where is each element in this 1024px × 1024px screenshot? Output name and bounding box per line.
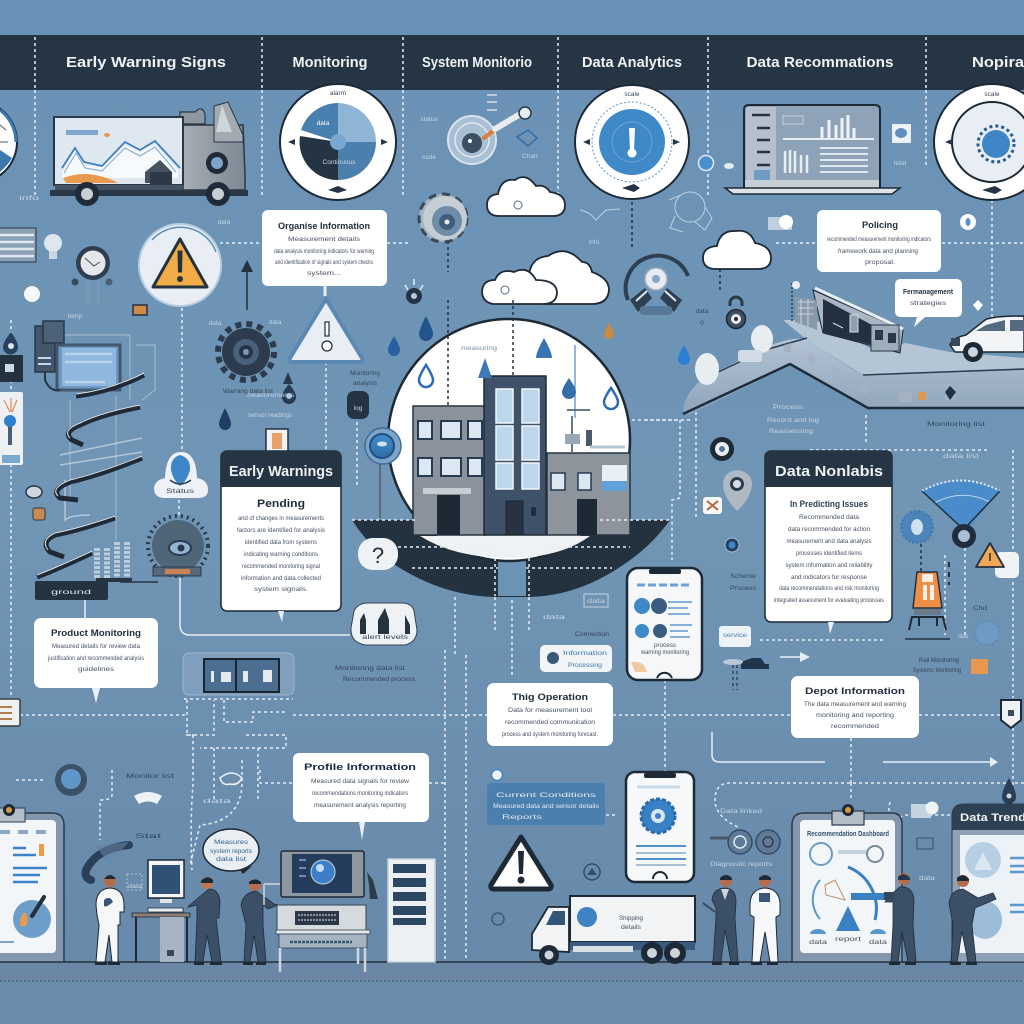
icon: clipped left gauge circle [0, 101, 17, 183]
icon: sensor gear on base [120, 516, 208, 612]
icon: bottom-left small glyphs: data [203, 798, 232, 805]
icon: orange tower [905, 572, 950, 639]
heading: data analytics: Data Analytics [582, 54, 682, 71]
chart: monitoring pie dial: data [317, 120, 330, 127]
scene: floor [0, 962, 1024, 1024]
icon: phone with dashboard: warning monitoring [640, 649, 689, 656]
icon: water drops group [3, 316, 1016, 804]
callout: policy: recommended measurement monitoring indicators [827, 236, 932, 243]
connector lines over the central illustration [352, 300, 680, 596]
icon: delivery truck: Shipping [619, 915, 643, 922]
text: labels under road [767, 404, 985, 460]
panel: data trends [952, 804, 1024, 962]
icon: small white tags: 0 [700, 320, 704, 327]
icon: dark tag: log [354, 405, 363, 412]
icon: system monitor swirl with brush: Chart [522, 153, 538, 160]
icon: speech bubble: Measures [214, 839, 249, 846]
text: small label cluster: measurements [246, 392, 295, 399]
callout: small blue status [540, 645, 612, 672]
text: labels under road: Process [773, 404, 804, 411]
callout: small blue status: Processing [568, 662, 602, 669]
panel text lines: system signals. [254, 586, 308, 593]
icon: small shield glyphs [492, 864, 600, 925]
text: small label pair [335, 594, 609, 683]
icon: side tags near data panel [911, 802, 938, 882]
icon: cap over first worker: data [128, 883, 142, 890]
callout: diagnostic information: data analysis monitoring indicators for warning [274, 248, 374, 255]
worker: presenter at data panel [949, 875, 996, 965]
worker: white coat right [750, 875, 780, 965]
callout: small framework [895, 279, 983, 327]
icon: left orange tag [0, 699, 20, 726]
icon: laptop dashboard [725, 105, 900, 194]
callout: policy: proposal. [865, 259, 895, 266]
icon: cloud right [703, 231, 771, 269]
drops inside circle [419, 365, 433, 387]
icon: phone with gear [626, 772, 694, 882]
panel text lines: processes identified items [796, 550, 863, 557]
callout: diagnostic information: Measurement details [288, 236, 361, 243]
callout: blue data note: Measured data and sensor details [493, 803, 600, 810]
icon: bottom-left small glyphs: Stat [135, 833, 161, 840]
panel: right clipboard: Recommendation Dashboard [807, 831, 889, 838]
icon: system monitor swirl with brush [420, 95, 538, 164]
road with station and car [683, 281, 1024, 415]
car [950, 316, 1024, 352]
icon: twin gauges with caption [710, 808, 780, 868]
icon: speech bubble [203, 829, 259, 874]
icon: pale blue gear [973, 605, 999, 645]
icon: cloud small [487, 177, 565, 216]
text: small label cluster: data [209, 320, 222, 327]
panel heading: Data Nonlabis [775, 463, 883, 480]
icon: orange tag [266, 429, 288, 453]
icon: network sketch [580, 192, 712, 232]
panel text lines: integrated assessment for evaluating processes [774, 597, 885, 604]
icon: wifi signal fan [922, 480, 1000, 638]
panel text lines [237, 515, 326, 593]
icon: small white tags [589, 214, 976, 327]
icon: padlock [726, 297, 746, 328]
right building [547, 453, 630, 535]
callout: profit monitoring: measurement analysis reporting [314, 802, 406, 809]
callout: depot information: The data measurement and warning [804, 701, 906, 708]
icon: double cloud [482, 251, 609, 304]
panel text lines: measurement and data analysis [786, 538, 872, 545]
panel heading: Early Warnings [229, 463, 333, 480]
icon: sparkline bubble: alert levels [362, 634, 409, 641]
icon: steering dial [626, 256, 688, 315]
panel text lines: and of changes in measurements [238, 515, 325, 522]
text: small label cluster: data [269, 319, 282, 326]
panel: right clipboard: report [835, 936, 861, 943]
icon: system monitor swirl with brush: code [422, 154, 436, 161]
text: labels beside orange tag: Systems Monitoring [913, 667, 961, 674]
icon: shield badge [1001, 700, 1021, 728]
panel text lines: identified data from systems [245, 539, 318, 546]
text: small label pair: Monitoring data list [335, 665, 405, 672]
icon: light bulb [44, 234, 62, 259]
icon: mini van and tag: service [723, 632, 747, 639]
callout: depot information [791, 676, 919, 738]
callout: trip operation: process and system monitoring forecast. [502, 731, 598, 738]
worker: operator at desk [188, 877, 222, 965]
callout: product monitoring: guidelines [78, 666, 115, 673]
panel subtitle: Pending [257, 498, 305, 510]
text: labels under road: Monitoring list [927, 421, 985, 428]
icon: left status tags [0, 355, 23, 465]
icon: sensor ring and location pin: Scheme [730, 573, 756, 580]
dark base platform [352, 520, 670, 597]
icon: pale warning triangle [290, 299, 362, 362]
icon: small white tags: data [696, 308, 709, 315]
panel text lines: information and data collected [241, 575, 321, 582]
callout: policy: framework data and planning [838, 248, 918, 255]
text: small label cluster: temp [68, 313, 83, 320]
icon: black warning triangle [491, 837, 551, 889]
panel text lines: factors are identified for analysis [237, 527, 326, 534]
text: small label cluster: info [19, 195, 40, 202]
icon: delivery truck: details [621, 924, 642, 931]
panel text lines [774, 514, 885, 604]
icon: pale blue gear: Chd [973, 605, 987, 612]
heading: system monitoring: System Monitorio [422, 54, 532, 71]
icon: dark tag [347, 391, 369, 419]
worker: presenter at right clipboard [884, 873, 916, 965]
text: small label pair: data [543, 614, 566, 621]
header bar [0, 35, 1024, 90]
icon: small white tags: info [589, 239, 600, 246]
icon: spiral tower with monitor [26, 305, 155, 600]
panel text lines: and indicators for response [791, 574, 867, 581]
icon: horizontal bars panel [0, 228, 36, 262]
chart: monitoring pie dial [280, 84, 396, 200]
panel: right clipboard: data [869, 939, 888, 946]
icon: right target circle [934, 84, 1024, 200]
icon: spiral tower with monitor: ground [51, 589, 92, 596]
central illustration: building in circle [352, 319, 670, 597]
icon: location pin on cloud [154, 452, 208, 518]
chart: monitoring pie dial: Continuous [323, 159, 356, 166]
icon: phone with dashboard: process [654, 642, 677, 649]
panel text lines: system information and reliability [786, 562, 873, 569]
callout: policy: Policing [862, 220, 898, 230]
icon: data analytics alert circle [575, 85, 689, 199]
icon: small alarm node [405, 279, 423, 304]
panel: right clipboard: data [809, 939, 828, 946]
icon: system monitor swirl with brush: status [420, 116, 438, 123]
panel text lines: recommended monitoring signal [242, 563, 320, 570]
callout: diagnostic information: Organise Information [278, 221, 370, 231]
icon: blue sensor lens [365, 428, 401, 518]
icon: bottom-left small glyphs [55, 764, 242, 840]
callout: product monitoring: Product Monitoring [51, 628, 141, 638]
text: labels beside orange tag [913, 633, 988, 674]
icon: data analytics alert circle: scale [624, 91, 640, 98]
text: small label pair: data [587, 598, 606, 605]
icon: pressure gauge [72, 246, 112, 305]
callout: product monitoring: Measured details for review data [52, 643, 140, 650]
panel text lines: data recommendations and risk monitoring [779, 585, 879, 592]
chart: monitoring pie dial: alarm [330, 90, 346, 97]
panel: early warning [221, 429, 341, 622]
worker: white coat left [95, 875, 124, 965]
text: small label cluster: Monitoring [350, 370, 380, 377]
callout: blue data note [487, 770, 605, 825]
panel text lines: Recommended data [799, 514, 859, 521]
panel: left clipboard [0, 804, 64, 962]
icon: question bubble: ? [372, 543, 384, 568]
callout: trip operation [487, 683, 613, 746]
icon: dark gear [218, 324, 274, 380]
callout: profit monitoring: recommendations monitoring indicators [312, 790, 409, 797]
icon: phone with dashboard [627, 568, 702, 680]
callout: small framework: strategies [910, 300, 947, 307]
icon: small blue badge [698, 156, 734, 170]
text: small label cluster: data [218, 219, 231, 226]
left building [413, 406, 485, 535]
callout: diagnostic information [262, 210, 387, 296]
callout: depot information: monitoring and reporting [816, 712, 894, 719]
text: small label cluster [19, 195, 380, 419]
central illustration: building in circle: measuring [461, 345, 497, 352]
icon: workstation with desk [132, 860, 190, 962]
icon: location pin on cloud: Status [166, 488, 195, 495]
panel text lines: data recommended for action [788, 526, 870, 533]
callout: profit monitoring: Measured data signals for review [311, 778, 409, 785]
callout: trip operation: recommended communication [505, 719, 595, 726]
icon: sparkline bubble [351, 603, 417, 645]
icon: truck with chart screen [50, 102, 248, 206]
panel: twin screen module [183, 653, 294, 695]
text: labels under road: Reassessing [769, 428, 813, 435]
icon: big monitor and console [264, 851, 378, 972]
callout: profit monitoring: Profile Information [304, 762, 416, 772]
callout: diagnostic information: and identification of signals and system checks [275, 259, 374, 266]
text: small label cluster: Warning data list [223, 388, 273, 395]
callout: blue data note: Current Conditions [496, 792, 597, 799]
callout: product monitoring [34, 618, 158, 703]
callout: trip operation: Data for measurement tool [508, 707, 593, 714]
worker: operator at console [241, 879, 278, 965]
callout: trip operation: Thig Operation [512, 692, 588, 702]
icon: warning sign in circle [139, 224, 221, 306]
center tower [484, 376, 546, 535]
worker: analyst arms crossed [703, 875, 739, 965]
text: labels under road: Record and log [767, 417, 819, 424]
icon: white dot [24, 286, 40, 302]
callout: policy [817, 210, 941, 272]
text: labels beside orange tag: Rail Monitoring [919, 657, 959, 664]
callout: product monitoring: justification and recommended analysis [47, 655, 145, 662]
station building [813, 290, 903, 353]
icon: twin gauges with caption: Diagnostic reports [710, 861, 773, 868]
icon: delivery truck [532, 896, 695, 965]
icon: right target circle: scale [984, 91, 1000, 98]
panel subtitle: In Predicting Issues [790, 499, 868, 509]
text: small label pair: Recommended process [343, 676, 416, 683]
panel heading: Data Trend [960, 812, 1024, 824]
icon: speech bubble: data list [216, 856, 246, 863]
panel: right clipboard [792, 804, 902, 962]
icon: gear with metal ring [419, 194, 467, 242]
panel: data nonlabis [765, 451, 892, 634]
text: labels beside orange tag: data [958, 633, 968, 640]
icon: mini van and tag [719, 626, 769, 690]
icon: question bubble [358, 538, 398, 570]
icon: side tags near data panel: data [919, 875, 935, 882]
heading: early warning signs: Early Warning Signs [66, 54, 226, 71]
heading: data recommendations: Data Recommations [746, 54, 894, 71]
road markers [784, 343, 955, 402]
callout: small blue status: Information [563, 650, 607, 657]
text: labels under road: data list [943, 453, 979, 460]
icon: bottom-left small glyphs: Monitor list [126, 773, 174, 780]
icon: server rack [388, 859, 435, 962]
heading: monitoring: Monitoring [292, 54, 368, 71]
callout: diagnostic information: system... [307, 270, 341, 277]
callout: profit monitoring [293, 753, 429, 840]
panel text lines: indicating warning conditions [244, 551, 319, 558]
text: small label pair: Connection [575, 631, 609, 638]
icon: blue gear badge [901, 511, 949, 585]
callout: small framework: Fermanagement [903, 289, 954, 296]
icon: cap over first worker [86, 842, 142, 890]
icon: white cog tag: total [894, 160, 907, 167]
callout: depot information: Depot Information [805, 686, 905, 696]
icon: twin gauges with caption: Data linked [720, 808, 762, 815]
text: small label cluster: sensor readings [248, 412, 293, 419]
lamp posts and pins [791, 283, 793, 322]
icon: white cog tag [893, 125, 910, 167]
icon: sensor ring and location pin [703, 437, 757, 592]
icon: speech bubble: system reports [210, 848, 253, 855]
callout: blue data note: Reports [502, 814, 543, 821]
callout: depot information: recommended [831, 723, 879, 730]
icon: orange warning with tag [976, 543, 1019, 578]
icon: sensor ring and location pin: Process [730, 585, 757, 592]
text: small label cluster: analysis [353, 380, 378, 387]
